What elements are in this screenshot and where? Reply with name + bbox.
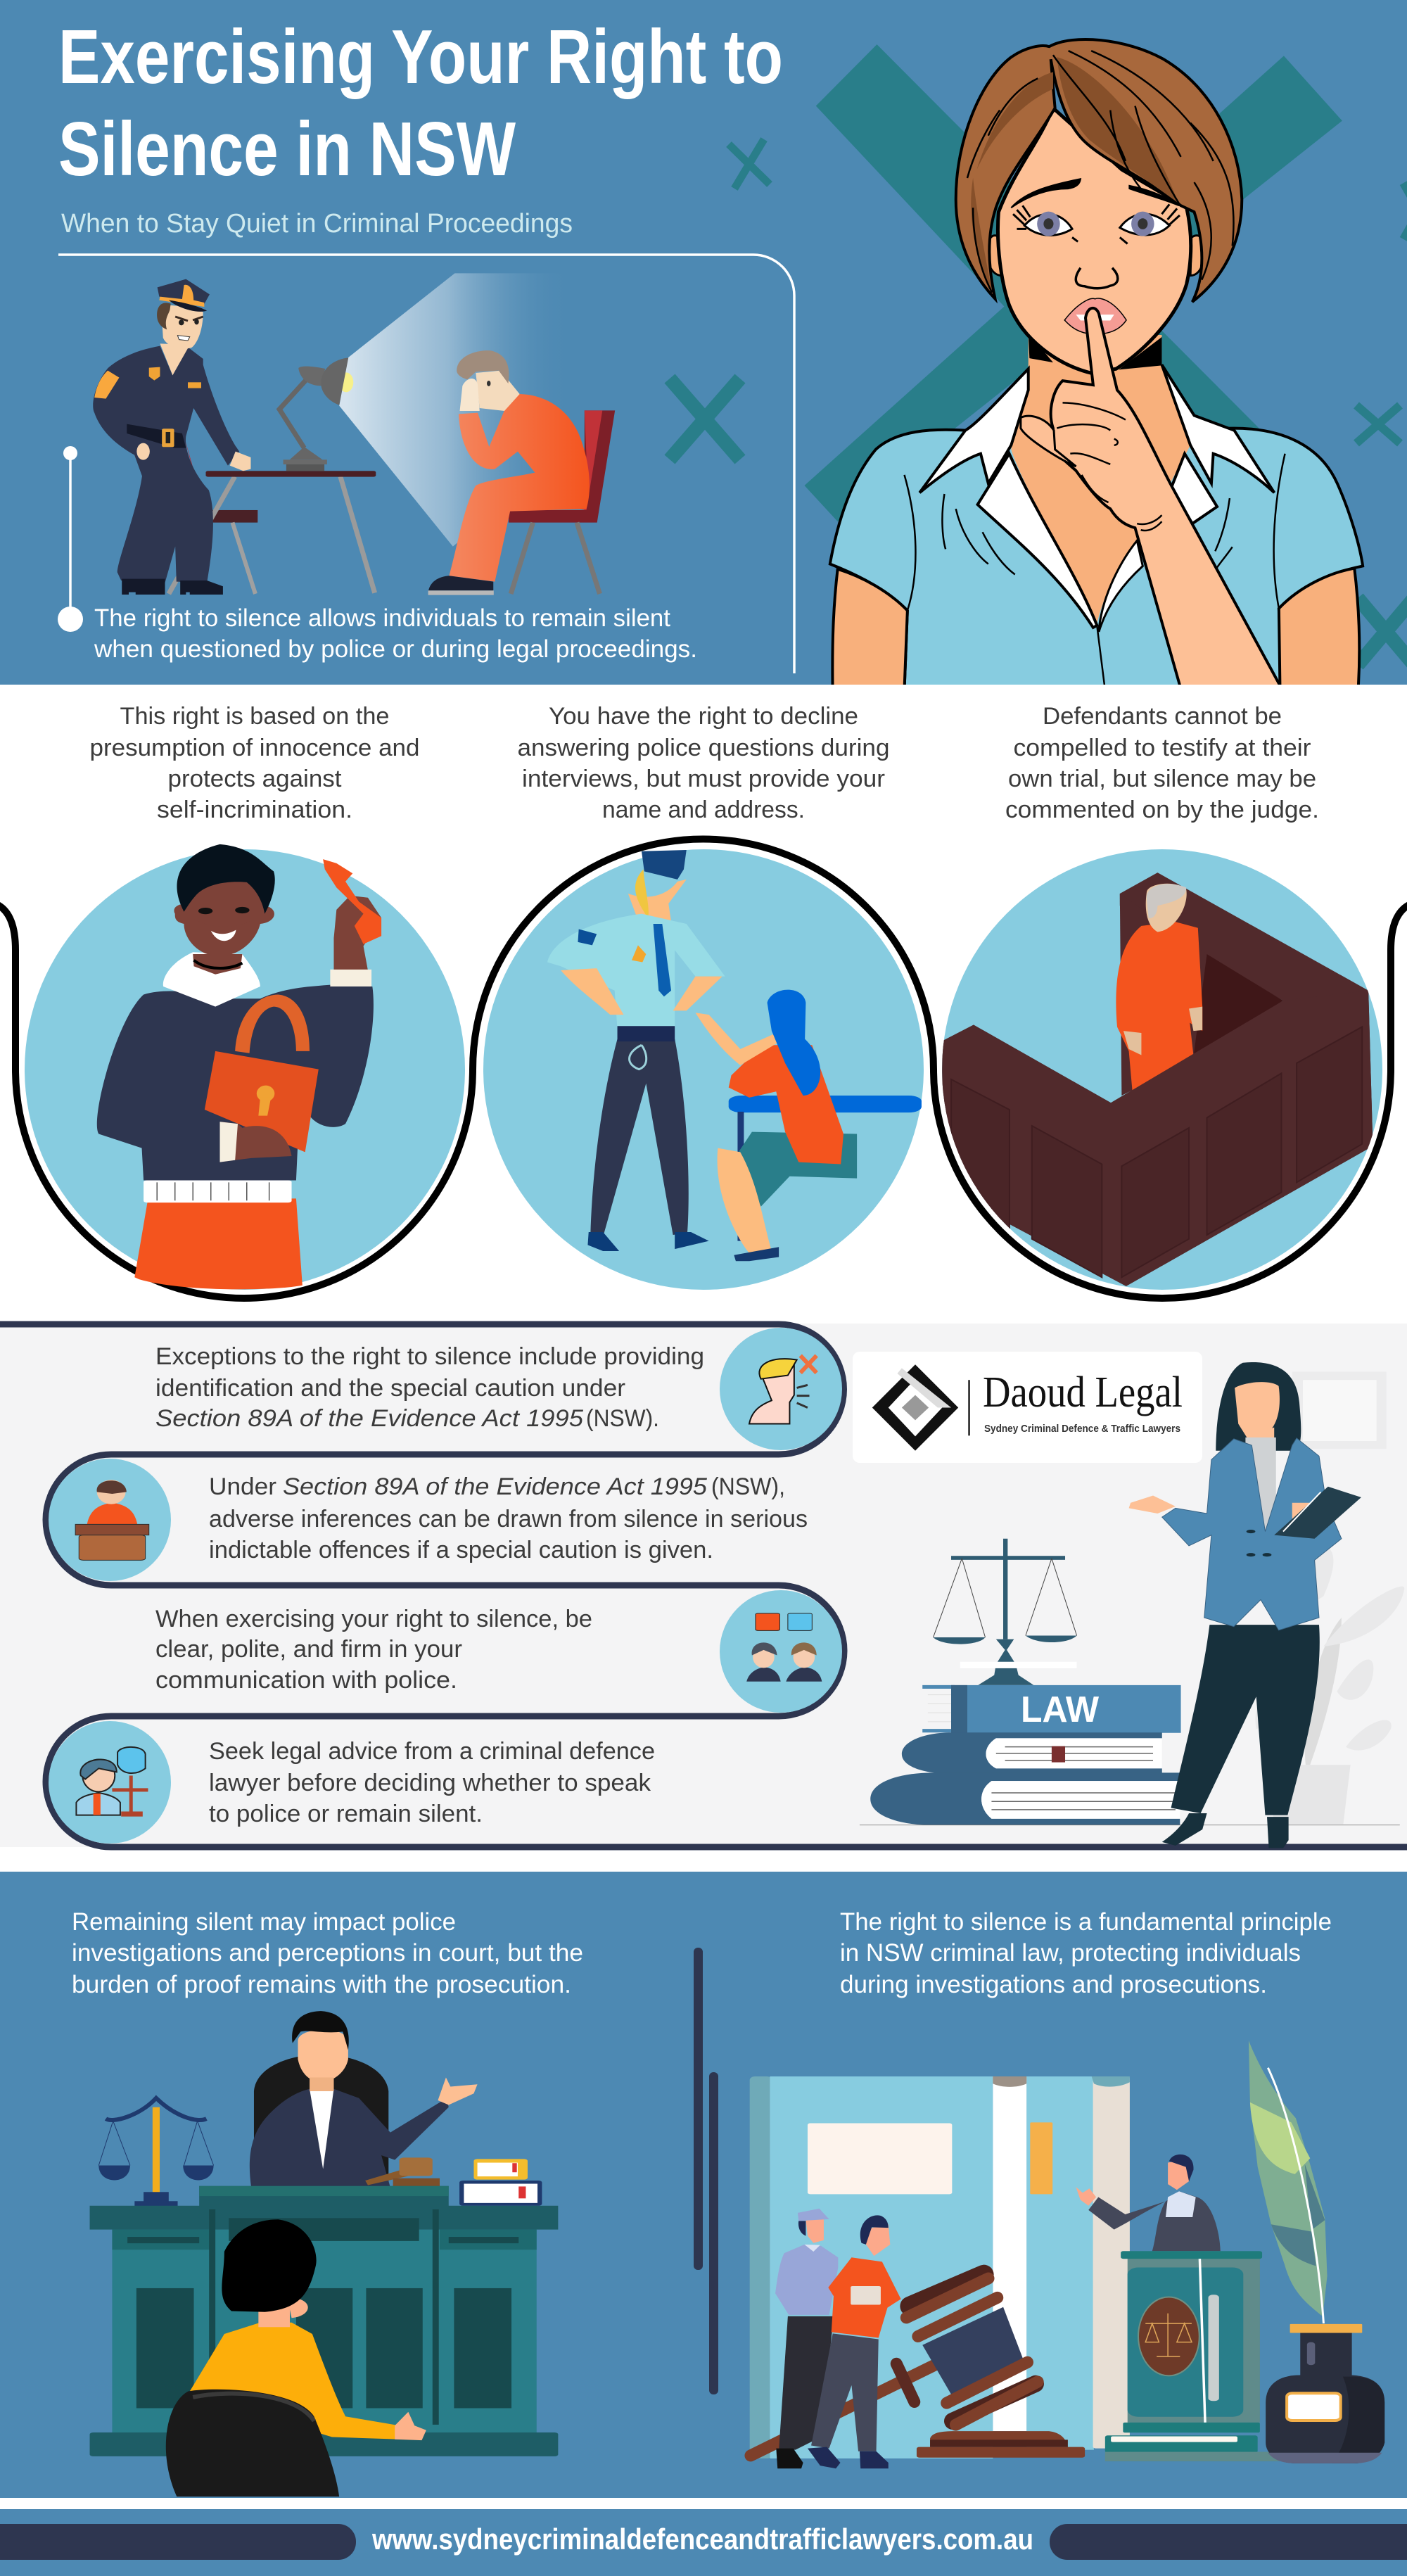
column 1 text bbox=[90, 703, 419, 823]
raised hand and forearm bbox=[1051, 308, 1282, 689]
police chair bbox=[186, 442, 257, 595]
icon circles bbox=[49, 1328, 842, 1844]
eyebrows bbox=[1011, 179, 1179, 208]
block text 4: Seek legal advice from a criminal defence bbox=[209, 1738, 655, 1765]
left text bbox=[72, 1908, 583, 1998]
interrogation scene bbox=[93, 273, 615, 595]
column 2 text: interviews, but must provide your bbox=[522, 766, 885, 792]
neck shadow bbox=[1029, 337, 1162, 370]
icon: two people talking bbox=[746, 1613, 822, 1682]
column 3 text bbox=[1005, 703, 1319, 823]
column 3 text: commented on by the judge. bbox=[1005, 797, 1319, 823]
giant law book bbox=[750, 2076, 1130, 2458]
block text 1: Section 89A of the Evidence Act 1995 bbox=[155, 1405, 583, 1432]
block text 2: Under bbox=[209, 1473, 276, 1500]
illustration: defendant in the dock bbox=[942, 873, 1373, 1286]
column 3 text: own trial, but silence may be bbox=[1008, 766, 1316, 792]
column 3 text: compelled to testify at their bbox=[1013, 735, 1311, 761]
guard bbox=[775, 2209, 838, 2468]
logo: Daoud Legal: Daoud Legal bbox=[983, 1369, 1183, 1416]
desk bbox=[169, 471, 376, 594]
large teal X background bbox=[804, 44, 1342, 521]
column 1 text: This right is based on the bbox=[120, 703, 390, 730]
header text bbox=[94, 604, 697, 663]
column 1 text: protects against bbox=[167, 766, 342, 792]
illustration: scales and law books bbox=[860, 1539, 1400, 1825]
woman with finger to lips bbox=[830, 39, 1363, 689]
right text: during investigations and prosecutions. bbox=[840, 1971, 1267, 1998]
icon: person at podium bbox=[75, 1480, 149, 1560]
block text 2: indictable offences if a special caution is given. bbox=[209, 1537, 713, 1563]
lectern bbox=[1105, 2251, 1280, 2461]
divider bars bbox=[694, 1948, 718, 2394]
block text 2 bbox=[209, 1473, 808, 1563]
panel: gray exceptions section bbox=[0, 1324, 1407, 1848]
website url: www.sydneycriminaldefenceandtrafficlawyers.com.au bbox=[371, 2523, 1033, 2556]
right text: in NSW criminal law, protecting individuals bbox=[840, 1939, 1301, 1967]
nose bbox=[1076, 268, 1118, 288]
column 2 text: You have the right to decline bbox=[549, 703, 858, 730]
panel: bottom blue section bbox=[0, 1872, 1407, 2498]
right text: The right to silence is a fundamental principle bbox=[840, 1908, 1332, 1936]
column 1 text: presumption of innocence and bbox=[90, 735, 419, 761]
ink bottle bbox=[1266, 2324, 1384, 2463]
header text: when questioned by police or during legal proceedings. bbox=[94, 635, 697, 663]
block text 1: Exceptions to the right to silence include providing bbox=[155, 1343, 704, 1370]
header text: The right to silence allows individuals to remain silent bbox=[94, 604, 670, 632]
column 2 text: name and address. bbox=[602, 797, 805, 823]
title bbox=[61, 27, 781, 176]
column 3 text: Defendants cannot be bbox=[1043, 703, 1282, 730]
title: Silence in NSW bbox=[58, 106, 516, 192]
block text 1: (NSW). bbox=[586, 1405, 659, 1432]
logo: Daoud Legal: Sydney Criminal Defence & Traffic Lawyers bbox=[984, 1423, 1180, 1435]
police officer bbox=[93, 279, 250, 595]
panel: header bbox=[0, 0, 1407, 689]
block text 3: communication with police. bbox=[155, 1667, 457, 1694]
collars bbox=[919, 369, 1029, 493]
law text: LAW bbox=[1021, 1689, 1100, 1730]
block text 1: identification and the special caution under bbox=[155, 1375, 625, 1402]
lips bbox=[1064, 298, 1126, 334]
left text: Remaining silent may impact police bbox=[72, 1908, 456, 1936]
connector line bbox=[58, 255, 794, 673]
column 2 text bbox=[518, 703, 889, 823]
title: Exercising Your Right to bbox=[58, 14, 783, 100]
footer bars bbox=[0, 2524, 1407, 2560]
block text 4 bbox=[209, 1738, 655, 1827]
subtitle: When to Stay Quiet in Criminal Proceedings bbox=[61, 209, 573, 239]
wall frame and plant bbox=[1255, 1371, 1404, 1824]
ears bbox=[987, 236, 1205, 276]
illustration: judge at bench with person bbox=[90, 2011, 558, 2496]
column 1 text: self-incrimination. bbox=[157, 797, 352, 823]
connecting black ribbon bbox=[0, 839, 1407, 1298]
small teal X marks bbox=[670, 139, 1407, 665]
illustration: lawyer woman bbox=[1129, 1362, 1404, 1848]
barrister at lectern bbox=[1076, 2155, 1221, 2251]
block text 2: adverse inferences can be drawn from silence in serious bbox=[209, 1506, 808, 1533]
circle backgrounds bbox=[25, 849, 1382, 1290]
icon: shouting head with X bbox=[749, 1356, 817, 1423]
defendant in orange shirt bbox=[808, 2215, 901, 2468]
quill feather bbox=[1249, 2041, 1328, 2323]
face bbox=[998, 108, 1191, 373]
illustration: law book, gavel, officers, quill bbox=[750, 2041, 1384, 2468]
block text 2: Section 89A of the Evidence Act 1995 bbox=[283, 1473, 707, 1500]
logo: Daoud Legal bbox=[853, 1352, 1202, 1463]
block text 3: clear, polite, and firm in your bbox=[155, 1636, 462, 1663]
column 2 text: answering police questions during bbox=[518, 735, 889, 761]
block text 2: (NSW), bbox=[711, 1473, 785, 1500]
suspect in orange bbox=[428, 350, 615, 595]
serpentine path bbox=[0, 1324, 1407, 1847]
desk lamp bbox=[279, 357, 353, 471]
block text 4: to police or remain silent. bbox=[209, 1801, 483, 1827]
icon: lawyer and scales bbox=[76, 1747, 148, 1817]
gavel bbox=[751, 2275, 1085, 2458]
block text 3: When exercising your right to silence, be bbox=[155, 1606, 592, 1632]
illustration: man with lock and key bbox=[97, 844, 381, 1289]
block text 1 bbox=[155, 1343, 704, 1432]
block text 4: lawyer before deciding whether to speak bbox=[209, 1770, 651, 1796]
left text: burden of proof remains with the prosecution. bbox=[72, 1971, 571, 1998]
right text bbox=[840, 1908, 1332, 1998]
shirt bbox=[830, 429, 1363, 689]
illustration: officer questioning woman bbox=[547, 850, 922, 1261]
white divider strip and footer bbox=[0, 2498, 1407, 2576]
eyes bbox=[1013, 204, 1180, 243]
hair bbox=[956, 39, 1242, 302]
panel: three rights circles bbox=[0, 703, 1407, 1298]
block text 3 bbox=[155, 1606, 592, 1694]
bare arms bbox=[832, 568, 1359, 689]
left text: investigations and perceptions in court, but the bbox=[72, 1939, 583, 1967]
